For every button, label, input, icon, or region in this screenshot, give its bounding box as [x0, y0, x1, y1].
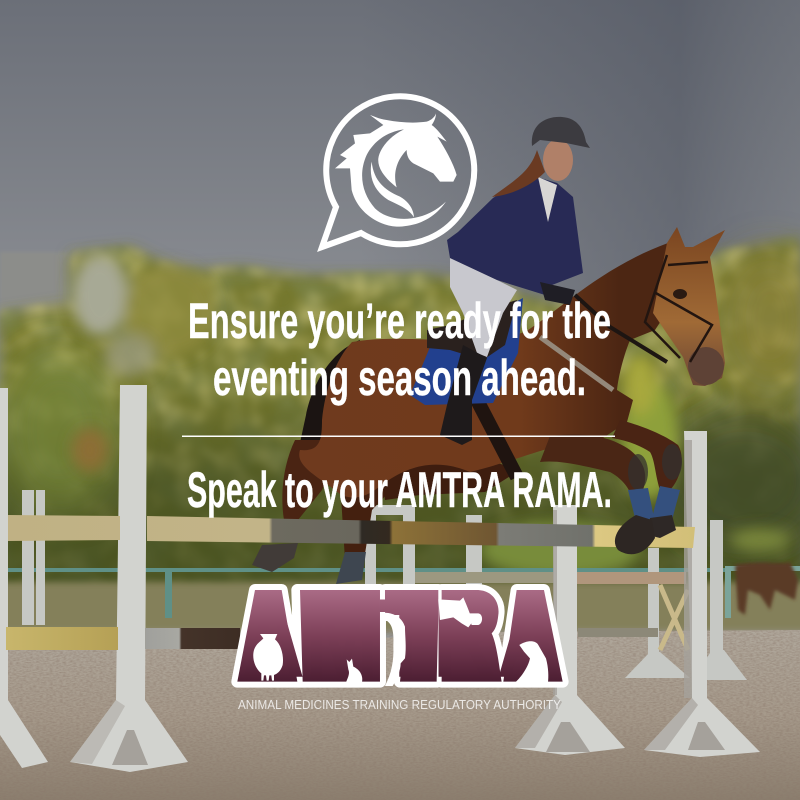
rider [440, 117, 590, 445]
horse [299, 227, 725, 522]
boot [440, 345, 487, 445]
shirt collar [538, 177, 557, 222]
front hooves [615, 515, 676, 554]
logo strapline: ANIMAL MEDICINES TRAINING REGULATORY AUTHORITY [238, 698, 562, 712]
centre-right standard [515, 505, 625, 755]
centre-left standard [70, 385, 188, 772]
sheep [253, 634, 283, 681]
right standard [644, 431, 760, 757]
foliage texture [0, 244, 800, 580]
tree line [0, 238, 800, 610]
horse muzzle [688, 347, 724, 385]
upper jump pole [8, 515, 695, 548]
bridle [645, 255, 712, 362]
background fences and standards [22, 490, 747, 680]
horse head [653, 227, 725, 386]
horse head emblem [335, 113, 457, 227]
R counter [468, 613, 482, 625]
logo letters: AMTRA [241, 577, 560, 701]
horse eye [673, 289, 687, 299]
helmet [532, 117, 590, 148]
speech bubble horse logo [322, 96, 474, 247]
dog [515, 641, 548, 683]
horse hind legs [252, 440, 410, 584]
AMTRA logo [237, 577, 563, 701]
horse tail and leg [383, 613, 406, 686]
saddle pad [410, 298, 523, 405]
reins [575, 295, 667, 362]
face [543, 139, 573, 181]
horse body and neck [299, 243, 700, 498]
jump standards [0, 385, 760, 772]
jump standard shading [70, 440, 725, 765]
divider [182, 436, 615, 437]
jacket [447, 175, 583, 295]
saddle [427, 300, 517, 360]
breastplate [540, 337, 613, 390]
glove [540, 282, 575, 305]
lower tree shadow [0, 380, 800, 610]
headline line 2: eventing season ahead. [213, 350, 586, 406]
horse knees [628, 444, 682, 490]
girth [477, 400, 517, 477]
horse tail [298, 340, 360, 454]
breeches [450, 258, 517, 357]
emblem mane sweep [371, 162, 414, 217]
horse leg wraps [628, 488, 654, 522]
horse head [438, 597, 473, 627]
logo letter backing [237, 590, 563, 682]
horse front legs [540, 435, 648, 512]
hair [492, 150, 545, 197]
cat [346, 659, 362, 682]
animal silhouettes [253, 597, 548, 686]
left standard [0, 388, 48, 768]
speech bubble outline [322, 96, 474, 247]
horse far thigh [382, 445, 520, 500]
lower jump pole [6, 627, 240, 650]
